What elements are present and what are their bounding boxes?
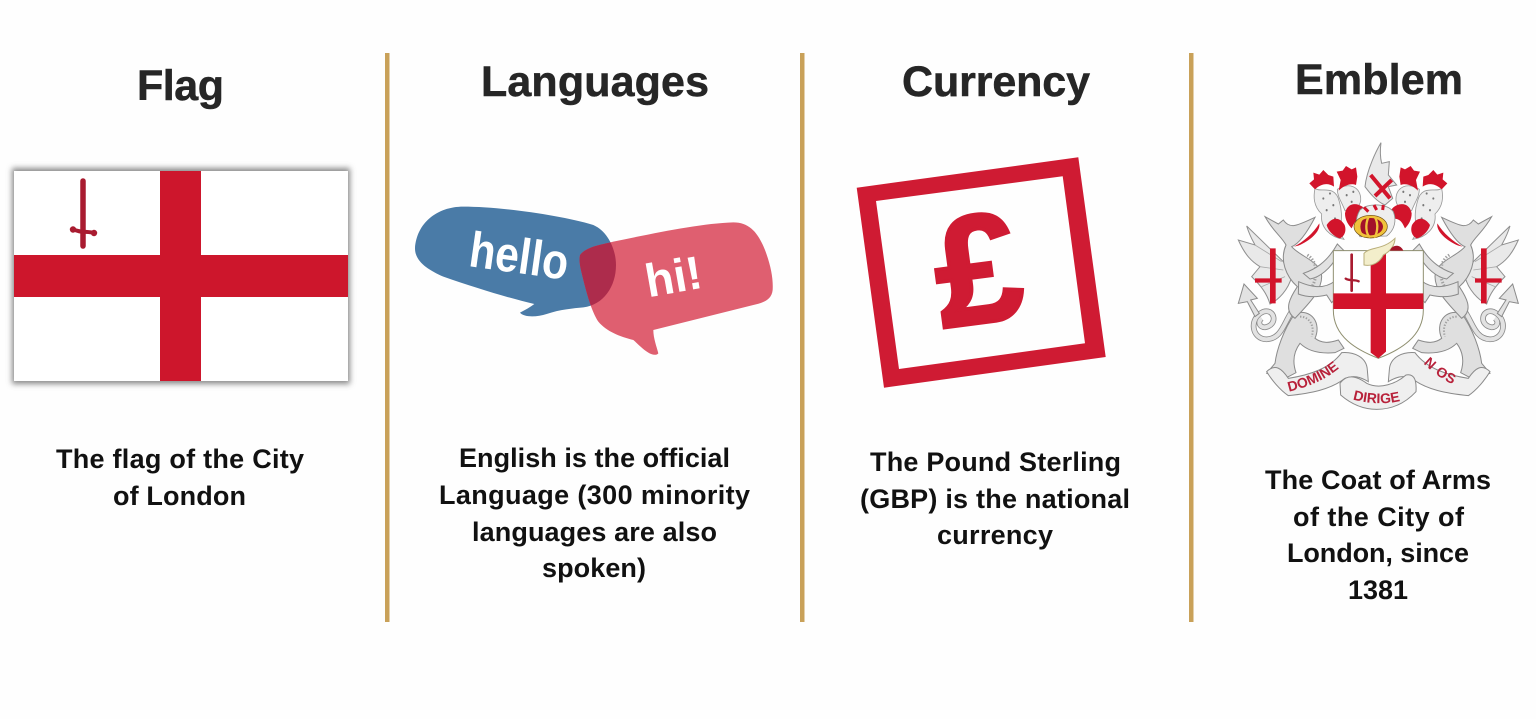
text: emblem description — [1265, 465, 1491, 605]
crest fan with saltire — [1365, 143, 1397, 205]
heading: Flag: Flag — [137, 62, 224, 110]
text: emblem description: London, since — [1287, 538, 1469, 568]
divider 1 — [385, 53, 390, 622]
helmet and crown — [1354, 205, 1395, 238]
icon: overlapping speech bubbles — [415, 207, 773, 355]
text: flag description — [56, 444, 304, 511]
motto ribbon: N OS — [1424, 356, 1456, 384]
icon: flag of the City of London — [12, 168, 350, 384]
divider 2 — [800, 53, 804, 622]
icon: overlapping speech bubbles: hello — [466, 221, 572, 291]
text: languages description: Language (300 minority — [439, 480, 750, 510]
icon: overlapping speech bubbles: hi! — [641, 246, 706, 307]
motto ribbon: DOMINE — [1287, 361, 1339, 392]
text: currency description: currency — [937, 520, 1053, 550]
icon: coat of arms of the City of London — [1238, 142, 1520, 410]
text: emblem description: 1381 — [1348, 575, 1408, 605]
text: currency description: The Pound Sterling — [870, 447, 1121, 477]
heading: Languages: Languages — [481, 58, 709, 106]
panel: flag — [12, 62, 350, 511]
motto ribbon: DIRIGE — [1354, 390, 1400, 404]
text: currency description: (GBP) is the national — [860, 484, 1130, 514]
heading: Emblem: Emblem — [1295, 56, 1463, 104]
text: languages description: English is the official — [459, 443, 730, 473]
text: flag description: of London — [113, 481, 246, 511]
heading: Currency: Currency — [902, 58, 1090, 106]
icon: pound sign in tilted square: £ — [924, 178, 1032, 361]
text: flag description: The flag of the City — [56, 444, 304, 474]
divider 3 — [1189, 53, 1194, 622]
text: languages description: spoken) — [542, 553, 646, 583]
text: currency description — [860, 447, 1130, 550]
motto ribbon — [1266, 352, 1490, 410]
panel: currency — [857, 58, 1130, 550]
text: emblem description: The Coat of Arms — [1265, 465, 1491, 495]
text: emblem description: of the City of — [1293, 502, 1465, 532]
panel: emblem — [1238, 56, 1520, 605]
panel: languages — [415, 58, 773, 583]
icon: pound sign in tilted square — [857, 157, 1106, 388]
text: languages description: languages are also — [472, 517, 717, 547]
text: languages description — [439, 443, 750, 583]
shield — [1333, 238, 1423, 358]
